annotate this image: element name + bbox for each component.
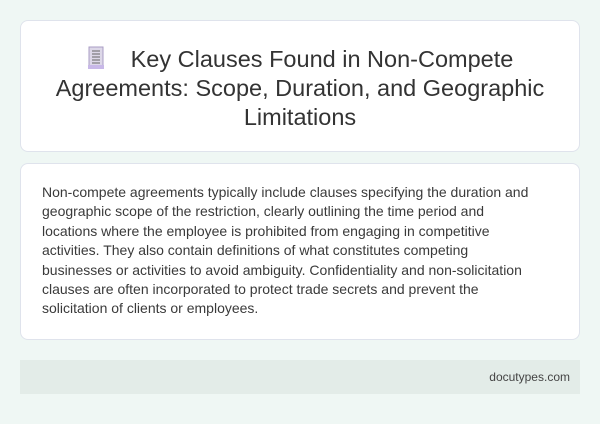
icon: document (88, 46, 104, 69)
description text: activities. They also contain definitions of what constitutes competing (42, 242, 468, 258)
title: Key Clauses Found in Non-Compete Agreements: Scope, Duration, and Geographic Limitations (56, 46, 544, 130)
description text: Non-compete agreements typically include clauses specifying the duration and (42, 184, 528, 200)
title card (20, 20, 580, 152)
footer: docutypes.com (489, 370, 570, 384)
description text: businesses or activities to avoid ambiguity. Confidentiality and non-solicitation (42, 262, 522, 278)
footer (20, 360, 580, 394)
description text: geographic scope of the restriction, clearly outlining the time period and (42, 203, 484, 219)
description text: clauses are often incorporated to protect trade secrets and prevent the (42, 281, 479, 297)
description text: solicitation of clients or employees. (42, 300, 258, 316)
description text (42, 184, 528, 316)
description text: locations where the employee is prohibited from engaging in competitive (42, 223, 489, 239)
description panel (20, 163, 580, 340)
